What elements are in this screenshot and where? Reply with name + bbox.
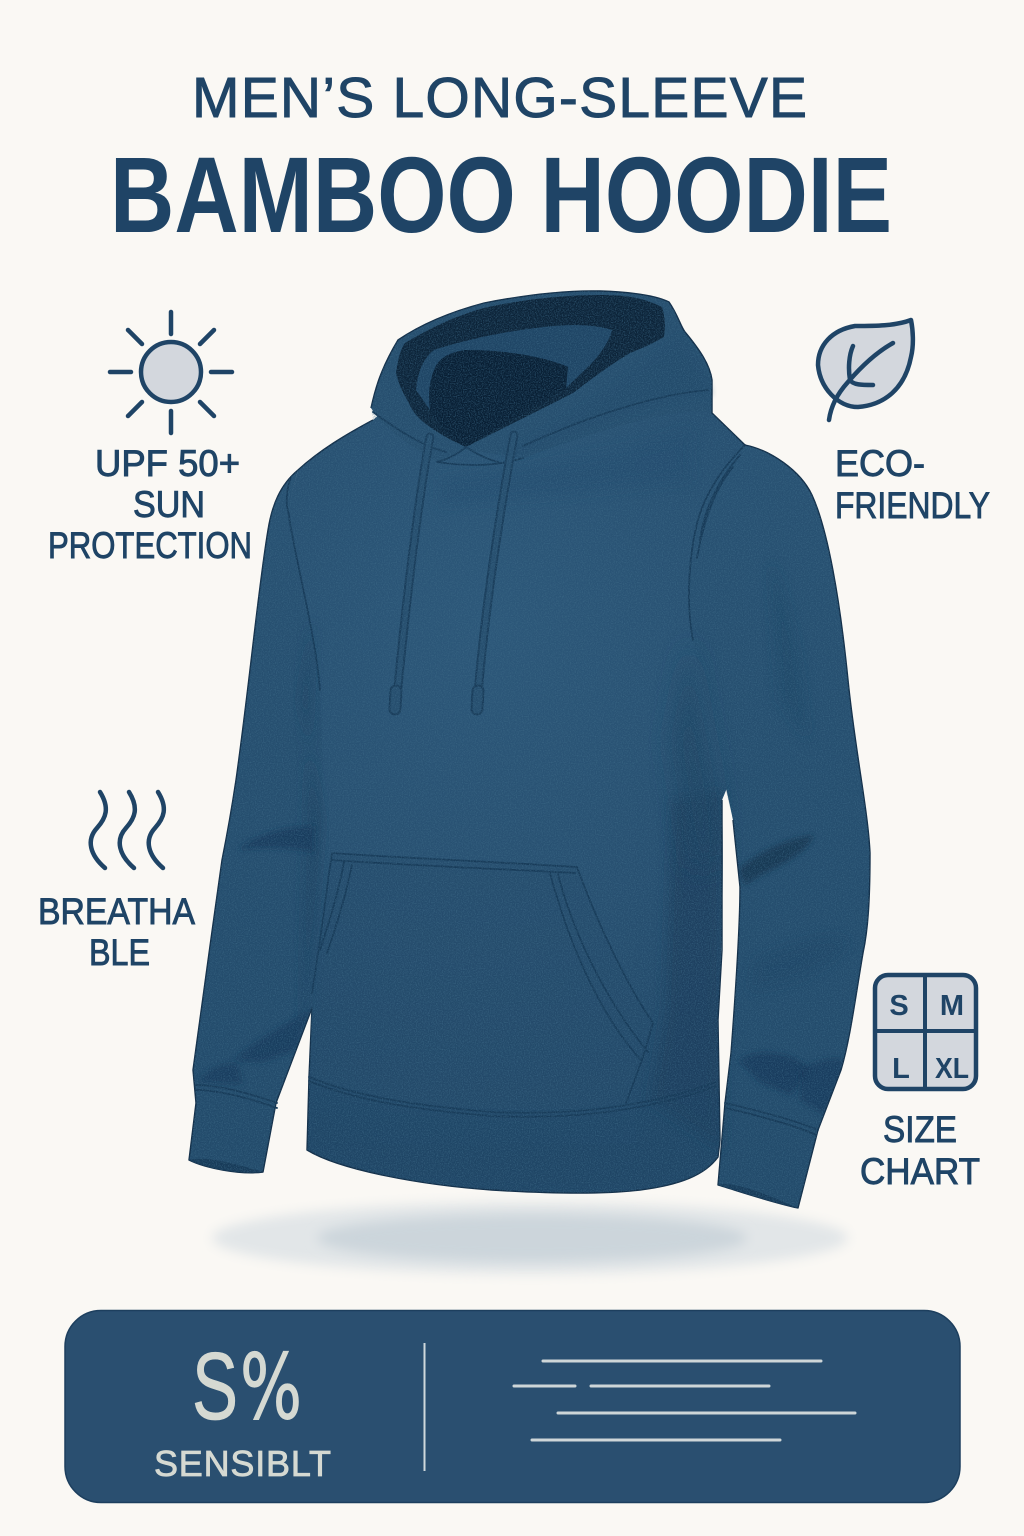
- silhouette outlines: [189, 291, 870, 1208]
- label: UPF 50+ sun protection: SUN: [133, 484, 205, 525]
- label: UPF 50+ sun protection: PROTECTION: [48, 525, 252, 566]
- label: UPF 50+ sun protection: UPF 50+: [95, 443, 240, 484]
- icon: size grid: L: [892, 1053, 910, 1085]
- icon: leaf: [818, 320, 913, 420]
- icon: sun: [110, 312, 232, 433]
- label: breathable: BLE: [89, 932, 150, 973]
- feature: breathable: [38, 792, 195, 973]
- title: [110, 66, 892, 255]
- icon: size grid: S: [889, 990, 909, 1022]
- title line: men's long-sleeve: MEN’S LONG-SLEEVE: [192, 66, 807, 130]
- label: size chart: CHART: [860, 1151, 980, 1192]
- icon: air waves: [91, 792, 164, 868]
- feature: UPF 50+ sun protection: [48, 312, 252, 566]
- label: size chart: [860, 1109, 980, 1192]
- hood seams: [373, 390, 708, 465]
- placeholder text lines: [514, 1361, 855, 1440]
- icon: size grid: M: [940, 990, 964, 1022]
- label: eco-friendly: FRIENDLY: [835, 485, 990, 526]
- icon: size grid: XL: [935, 1053, 969, 1085]
- fabric texture: [180, 285, 880, 1215]
- left sleeve: [189, 470, 322, 1173]
- icon: size grid: [875, 975, 976, 1089]
- label: eco-friendly: ECO-: [835, 443, 925, 484]
- feature: eco-friendly: [818, 320, 990, 526]
- logo: S% mark: %: [240, 1335, 302, 1440]
- drawstrings: [395, 435, 514, 709]
- right sleeve: [689, 445, 870, 1208]
- vertical divider: [424, 1343, 426, 1471]
- inner neck shadow: [429, 350, 568, 447]
- cuff openings: [189, 1159, 798, 1208]
- floor shadow: [212, 1202, 848, 1274]
- hoodie body: [285, 360, 760, 1193]
- logo: S% mark: S: [192, 1333, 238, 1440]
- label: breathable: [38, 891, 195, 973]
- shoulder and armhole seams: [287, 445, 745, 690]
- hood: [371, 291, 712, 462]
- hem and cuff seams: [196, 1077, 818, 1135]
- hood back lining panel: [416, 325, 612, 410]
- label: UPF 50+ sun protection: [48, 443, 252, 566]
- label: size chart: SIZE: [883, 1109, 957, 1150]
- label: breathable: BREATHA: [38, 891, 195, 932]
- hoodie illustration: [180, 285, 880, 1215]
- hood opening (dark lining): [396, 295, 665, 447]
- feature: size chart: [860, 975, 980, 1192]
- label: eco-friendly: [835, 443, 990, 526]
- fabric shading: [198, 430, 850, 1195]
- logo: S% mark: [192, 1333, 302, 1440]
- brand name: SENSIBLT: [154, 1443, 331, 1484]
- panel: brand footer: [65, 1310, 960, 1502]
- pocket: [310, 853, 653, 1110]
- hood fold shading: [500, 335, 712, 456]
